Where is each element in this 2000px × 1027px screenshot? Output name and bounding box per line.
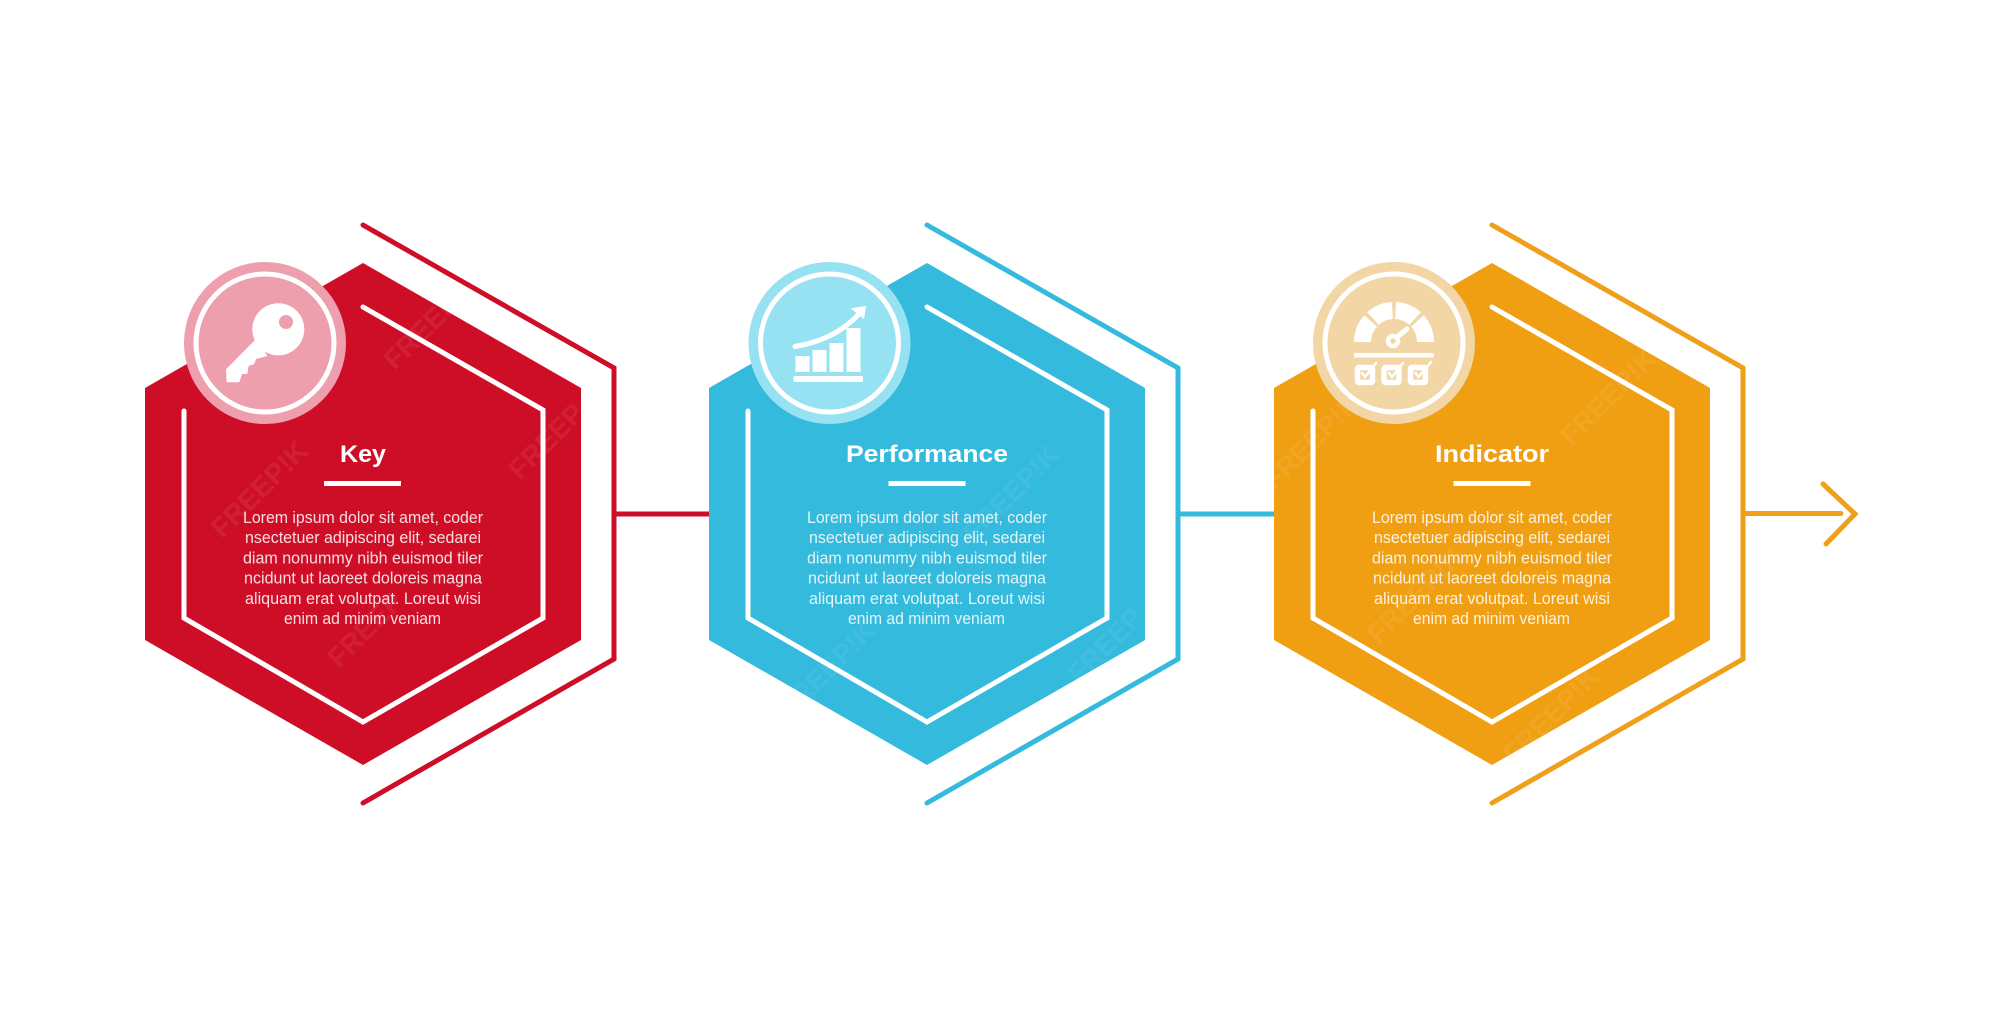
heading: Indicator: Indicator — [1435, 441, 1549, 468]
connector: blue — [1178, 512, 1276, 516]
text block: Indicator: Lorem ipsum dolor sit amet, coder — [1372, 508, 1612, 527]
text block: Indicator: diam nonummy nibh euismod tiler — [1372, 548, 1612, 567]
text block: Indicator — [1372, 508, 1612, 628]
text block: Indicator: ncidunt ut laoreet doloreis magna — [1373, 569, 1612, 588]
text block: Key: nsectetuer adipiscing elit, sedarei — [245, 528, 481, 547]
inner outline: white — [1313, 307, 1672, 722]
text block: Key: aliquam erat volutpat. Loreut wisi — [245, 589, 481, 608]
watermarks: Key: FREEP — [502, 397, 590, 485]
icon: growth chart in circle — [748, 262, 910, 424]
heading: Performance: Performance — [846, 441, 1008, 468]
text block: Performance: Lorem ipsum dolor sit amet, coder — [807, 508, 1047, 527]
text block: Performance: ncidunt ut laoreet doloreis magna — [808, 569, 1047, 588]
icon: key in circle — [184, 262, 346, 424]
arrow: orange — [1743, 484, 1855, 544]
watermarks: Indicator — [1257, 343, 1663, 770]
text block: Indicator: aliquam erat volutpat. Loreut wisi — [1374, 589, 1610, 608]
connector: red — [613, 512, 712, 516]
watermarks: Key: FREEP — [377, 287, 465, 375]
icon: gauge and checkboxes in circle — [1313, 262, 1475, 424]
watermarks: Indicator: FREEP!K — [1554, 343, 1663, 452]
text block: Key: diam nonummy nibh euismod tiler — [243, 548, 483, 567]
watermarks: Performance: FREEP — [1061, 601, 1149, 689]
text block: Key — [243, 508, 483, 628]
watermarks: Key — [205, 287, 590, 673]
text block: Performance: nsectetuer adipiscing elit, sedarei — [809, 528, 1045, 547]
watermarks: Indicator: FREEP!K — [1361, 541, 1470, 650]
watermarks: Indicator: FREEP!K — [1257, 387, 1366, 496]
outer bracket: red — [363, 225, 614, 803]
inner outline: white — [748, 307, 1107, 722]
text block: Indicator: enim ad minim veniam — [1413, 609, 1570, 628]
text block: Key: ncidunt ut laoreet doloreis magna — [244, 569, 483, 588]
heading underline — [324, 481, 401, 486]
hexagon: blue — [709, 263, 1145, 765]
heading: Key: Key — [340, 441, 387, 468]
watermarks: Indicator: FREEP!K — [1497, 661, 1606, 770]
panel: Key — [145, 225, 712, 803]
text block: Key: enim ad minim veniam — [284, 609, 441, 628]
watermarks: Performance: FREEP!K — [773, 615, 882, 724]
hexagon: orange — [1274, 263, 1710, 765]
hexagon: red — [145, 263, 581, 765]
text block: Performance — [807, 508, 1047, 628]
watermarks: Key: FREEP — [321, 585, 409, 673]
text block: Key: Lorem ipsum dolor sit amet, coder — [243, 508, 483, 527]
watermarks: Performance — [773, 311, 1149, 724]
watermarks: Performance: FREEP!K — [807, 311, 916, 420]
text block: Performance: enim ad minim veniam — [848, 609, 1005, 628]
outer bracket: blue — [927, 225, 1178, 803]
heading underline — [888, 481, 966, 486]
panel: Performance — [709, 225, 1276, 803]
outer bracket: orange — [1492, 225, 1743, 803]
heading underline — [1454, 481, 1530, 486]
text block: Performance: diam nonummy nibh euismod tiler — [807, 548, 1047, 567]
watermarks: Performance: FREEP!K — [957, 439, 1066, 548]
text block: Performance: aliquam erat volutpat. Loreut wisi — [809, 589, 1045, 608]
panel: Indicator — [1257, 225, 1855, 803]
text block: Indicator: nsectetuer adipiscing elit, sedarei — [1374, 528, 1610, 547]
watermarks: Key: FREEP!K — [205, 435, 314, 544]
inner outline: white — [184, 307, 543, 722]
